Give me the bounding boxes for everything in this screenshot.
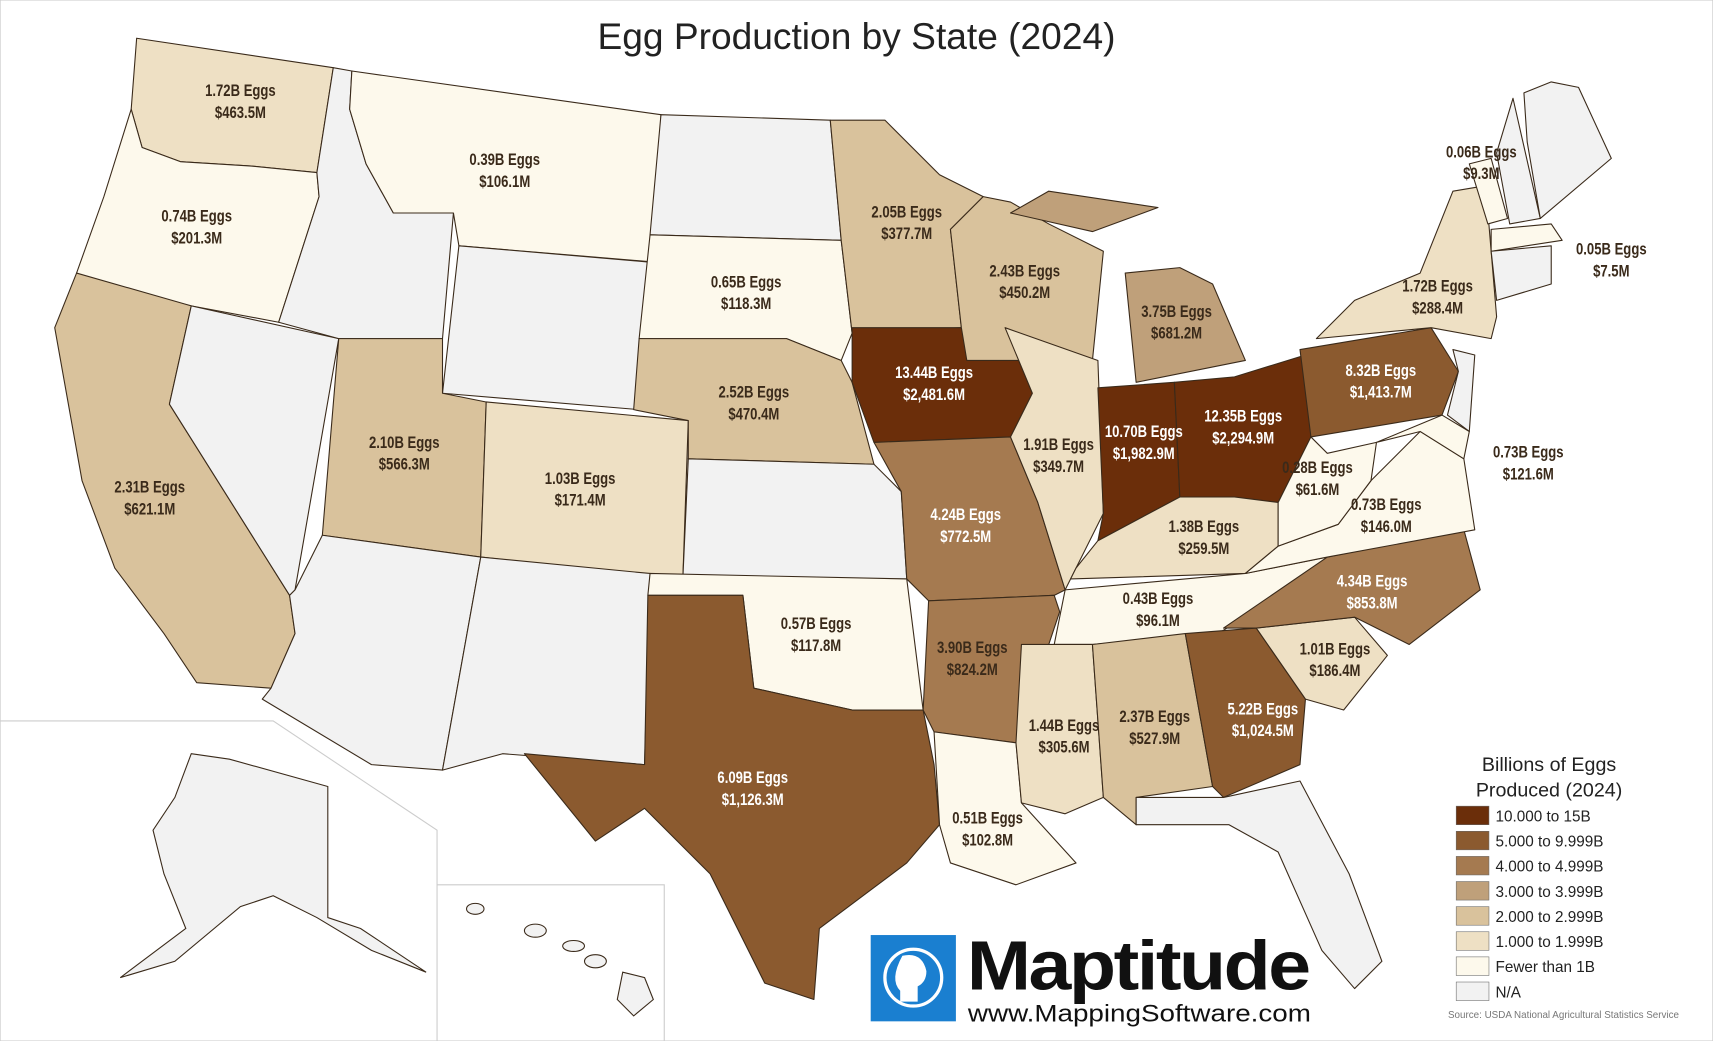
state labels: 4.34B Eggs bbox=[1337, 573, 1407, 591]
state labels: $121.6M bbox=[1503, 466, 1554, 484]
state labels: $171.4M bbox=[555, 493, 606, 510]
state labels: $470.4M bbox=[728, 406, 779, 424]
state labels: $106.1M bbox=[479, 174, 530, 191]
state labels: $96.1M bbox=[1136, 613, 1180, 630]
state labels: $450.2M bbox=[999, 285, 1050, 303]
state labels: 5.22B Eggs bbox=[1228, 701, 1298, 719]
state labels: 6.09B Eggs bbox=[717, 770, 788, 788]
title: Egg Production by State (2024) bbox=[597, 15, 1116, 57]
legend: 5.000 to 9.999B bbox=[1496, 834, 1603, 851]
state labels: $349.7M bbox=[1033, 459, 1084, 476]
inset: Alaska bbox=[0, 721, 437, 1041]
state labels: 0.74B Eggs bbox=[161, 208, 232, 226]
legend: 3.000 to 3.999B bbox=[1496, 884, 1603, 901]
legend: 4.000 to 4.999B bbox=[1496, 859, 1603, 876]
state labels: 2.05B Eggs bbox=[871, 204, 942, 222]
state labels: $61.6M bbox=[1296, 482, 1339, 499]
state labels: $1,413.7M bbox=[1350, 384, 1412, 402]
legend: 2.000 to 2.999B bbox=[1496, 909, 1603, 926]
state labels: $377.7M bbox=[881, 226, 932, 244]
inset: Hawaii bbox=[437, 885, 664, 1041]
state labels: $2,294.9M bbox=[1212, 430, 1274, 448]
state labels: $853.8M bbox=[1347, 595, 1398, 613]
state labels: $463.5M bbox=[215, 105, 266, 122]
state labels: 0.06B Eggs bbox=[1446, 144, 1517, 162]
legend: Billions of Eggs bbox=[1482, 754, 1616, 776]
state labels: 1.01B Eggs bbox=[1300, 641, 1370, 659]
state labels: $186.4M bbox=[1309, 663, 1360, 681]
state labels: 2.43B Eggs bbox=[989, 263, 1060, 281]
state labels: 0.73B Eggs bbox=[1351, 497, 1422, 515]
state labels: $118.3M bbox=[721, 296, 771, 314]
state labels: 3.75B Eggs bbox=[1141, 304, 1212, 321]
state labels: 0.28B Eggs bbox=[1282, 460, 1353, 477]
state labels: 0.43B Eggs bbox=[1123, 591, 1193, 608]
state labels: 12.35B Eggs bbox=[1204, 408, 1282, 426]
logo: Maptitude: www.MappingSoftware.com bbox=[967, 1000, 1311, 1027]
state labels: 1.72B Eggs bbox=[1402, 278, 1473, 296]
state labels: $1,126.3M bbox=[722, 792, 784, 809]
state labels: 1.38B Eggs bbox=[1169, 519, 1239, 536]
state labels: $621.1M bbox=[124, 501, 175, 519]
state labels: 0.05B Eggs bbox=[1576, 241, 1647, 259]
state labels: $7.5M bbox=[1593, 263, 1630, 281]
legend: Fewer than 1B bbox=[1496, 959, 1595, 976]
state labels: $117.8M bbox=[791, 638, 841, 655]
logo: Maptitude: Maptitude bbox=[967, 927, 1309, 1005]
state labels: $1,982.9M bbox=[1113, 446, 1175, 463]
state labels: 4.24B Eggs bbox=[930, 507, 1001, 524]
state labels: $824.2M bbox=[947, 662, 998, 679]
state labels: $1,024.5M bbox=[1232, 723, 1294, 741]
logo: Maptitude bbox=[871, 927, 1311, 1027]
state labels: $566.3M bbox=[379, 456, 430, 474]
state labels: 10.70B Eggs bbox=[1105, 424, 1183, 441]
state labels: 1.44B Eggs bbox=[1029, 718, 1099, 735]
state labels: 1.03B Eggs bbox=[545, 471, 615, 488]
legend: 10.000 to 15B bbox=[1496, 808, 1591, 825]
source note: Source: USDA National Agricultural Statistics Service bbox=[1448, 1010, 1680, 1021]
state labels: 0.51B Eggs bbox=[952, 810, 1023, 828]
legend: 1.000 to 1.999B bbox=[1496, 934, 1603, 951]
state labels bbox=[114, 83, 1647, 850]
state labels: $305.6M bbox=[1039, 739, 1090, 757]
state labels: 1.91B Eggs bbox=[1023, 437, 1094, 454]
state labels: 2.31B Eggs bbox=[114, 479, 185, 497]
state labels: $259.5M bbox=[1178, 541, 1229, 558]
state labels: $288.4M bbox=[1412, 300, 1463, 318]
state labels: 1.72B Eggs bbox=[205, 83, 276, 101]
state labels: 2.10B Eggs bbox=[369, 435, 440, 452]
state labels: $527.9M bbox=[1129, 731, 1180, 748]
state labels: $102.8M bbox=[962, 832, 1013, 850]
state labels: 2.52B Eggs bbox=[719, 384, 789, 402]
state labels: $681.2M bbox=[1151, 325, 1202, 343]
state labels: 8.32B Eggs bbox=[1346, 363, 1416, 380]
state labels: 2.37B Eggs bbox=[1119, 709, 1190, 726]
state labels: 0.73B Eggs bbox=[1493, 444, 1564, 462]
state labels: 0.39B Eggs bbox=[469, 152, 540, 169]
state labels: $772.5M bbox=[940, 529, 991, 546]
state labels: 13.44B Eggs bbox=[895, 365, 973, 382]
state labels: 0.65B Eggs bbox=[711, 274, 781, 292]
state labels: $201.3M bbox=[171, 230, 222, 248]
state labels: $2,481.6M bbox=[903, 387, 965, 404]
legend: N/A bbox=[1496, 984, 1522, 1001]
state labels: 0.57B Eggs bbox=[781, 616, 851, 634]
legend: Produced (2024) bbox=[1476, 779, 1622, 801]
state labels: $146.0M bbox=[1361, 519, 1412, 536]
state labels: $9.3M bbox=[1463, 166, 1500, 184]
state labels: 3.90B Eggs bbox=[937, 640, 1008, 658]
legend bbox=[1420, 743, 1639, 1005]
